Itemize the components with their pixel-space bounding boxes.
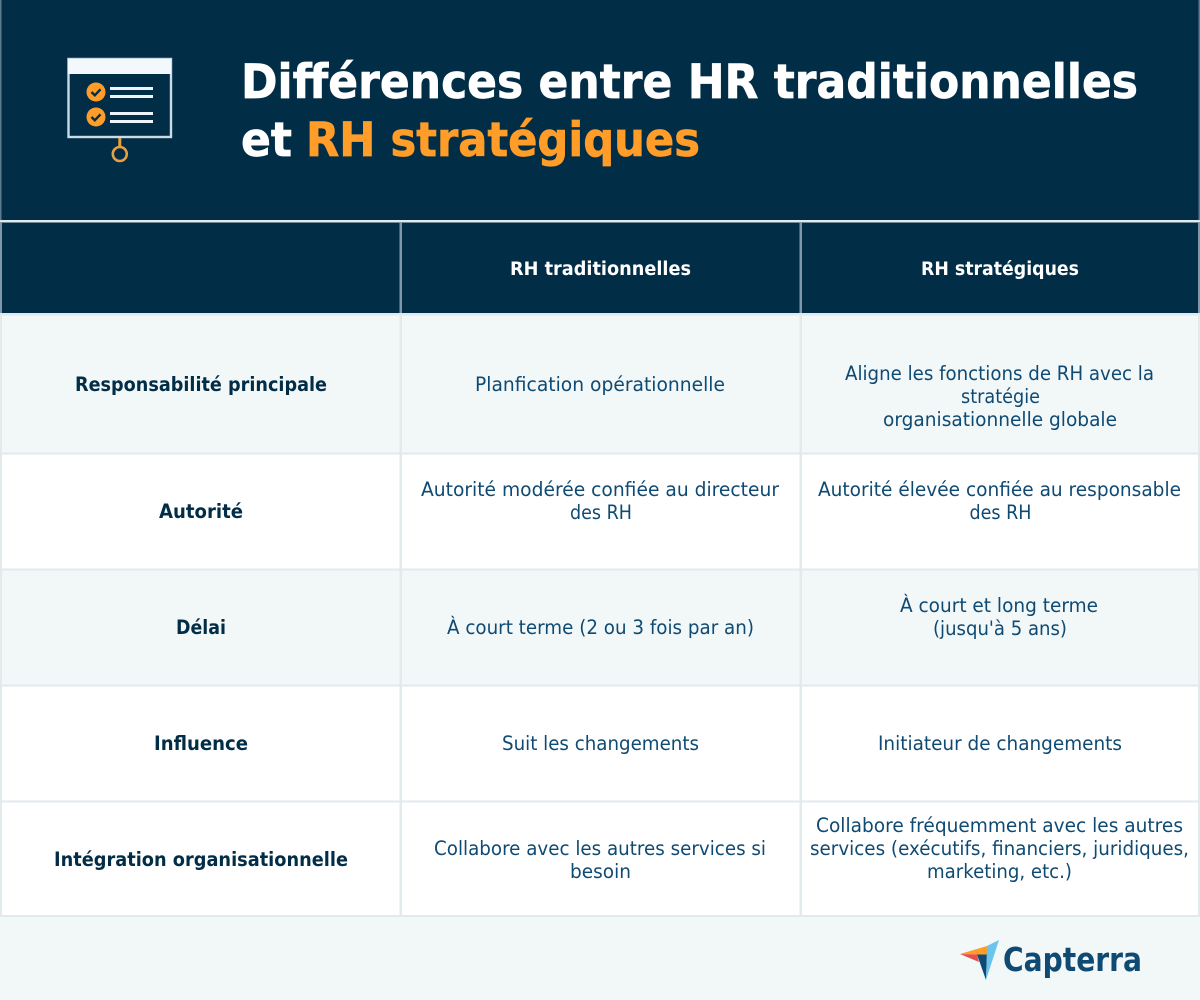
table bbox=[0, 220, 1200, 917]
row: Intégration organisationnelle bbox=[0, 802, 1200, 916]
row: Autorité: des RH bbox=[570, 501, 632, 524]
row: Influence: Suit les changements bbox=[502, 732, 699, 755]
row: Responsabilité principale: Aligne les fonctions de RH avec la bbox=[845, 362, 1154, 385]
row: Responsabilité principale: Planfication opérationnelle bbox=[475, 373, 725, 396]
row: Délai: À court terme (2 ou 3 fois par an) bbox=[447, 616, 754, 639]
table header row bbox=[0, 220, 1200, 315]
icon: Capterra arrow bbox=[960, 940, 999, 980]
icon: presentation board checklist bbox=[68, 59, 171, 161]
table header row: RH stratégiques bbox=[921, 259, 1079, 280]
row: Autorité: Autorité élevée confiée au responsable bbox=[818, 478, 1181, 501]
row: Intégration organisationnelle: Collabore avec les autres services si bbox=[434, 837, 766, 860]
row: Délai: (jusqu'à 5 ans) bbox=[933, 617, 1067, 640]
row: Influence bbox=[0, 686, 1200, 801]
row: Influence: Influence bbox=[154, 732, 248, 755]
row: Délai bbox=[0, 570, 1200, 685]
row: Intégration organisationnelle: besoin bbox=[570, 860, 631, 883]
wordmark: Capterra bbox=[1003, 940, 1142, 979]
row: Influence: Initiateur de changements bbox=[878, 732, 1122, 755]
title: RH stratégiques bbox=[306, 113, 700, 168]
title: et bbox=[241, 113, 292, 168]
row: Autorité: Autorité modérée confiée au directeur bbox=[421, 478, 780, 501]
table header row: RH traditionnelles bbox=[510, 259, 691, 280]
row: Responsabilité principale: Responsabilité principale bbox=[75, 373, 327, 396]
row: Autorité: des RH bbox=[970, 501, 1032, 524]
Capterra logo bbox=[960, 940, 1142, 980]
row: Responsabilité principale: stratégie bbox=[961, 385, 1040, 408]
row: Délai: À court et long terme bbox=[900, 594, 1098, 617]
row: Intégration organisationnelle: marketing, etc.) bbox=[927, 860, 1072, 883]
row: Délai: Délai bbox=[176, 616, 226, 639]
title: Différences entre HR traditionnelles bbox=[241, 55, 1138, 110]
header banner bbox=[0, 0, 1200, 220]
title bbox=[241, 55, 1138, 168]
row: Autorité bbox=[0, 454, 1200, 569]
row: Responsabilité principale bbox=[0, 315, 1200, 453]
row: Intégration organisationnelle: Collabore fréquemment avec les autres bbox=[816, 814, 1183, 837]
row: Autorité: Autorité bbox=[159, 500, 243, 523]
row: Intégration organisationnelle: Intégration organisationnelle bbox=[54, 848, 348, 871]
row: Responsabilité principale: organisationnelle globale bbox=[883, 408, 1117, 431]
